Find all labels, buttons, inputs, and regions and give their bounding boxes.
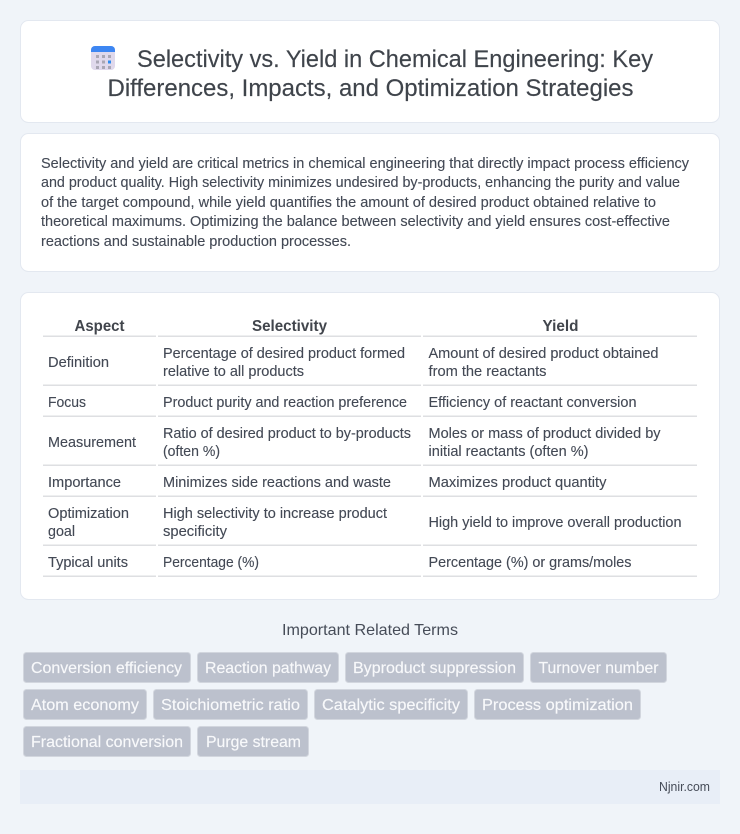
- tag: fractional conversion: Fractional conversion: [31, 734, 183, 751]
- table row: measurement: Measurement: [48, 435, 136, 451]
- table header: [74, 318, 578, 335]
- panel: introduction: [20, 134, 720, 272]
- tag: reaction pathway: Reaction pathway: [205, 660, 331, 677]
- tag: atom economy: Atom economy: [31, 697, 139, 714]
- title: [108, 46, 653, 102]
- table row: optimization goal: High yield to improve overall production: [428, 515, 682, 531]
- tags: related terms: [24, 652, 666, 756]
- table row: definition: relative to all products: [163, 364, 304, 380]
- table row: definition: Amount of desired product obtained: [428, 346, 658, 362]
- table header: Yield: [542, 318, 578, 335]
- table row: importance: Importance: [48, 475, 121, 491]
- table row: typical units: [48, 555, 632, 571]
- tag: catalytic specificity: Catalytic specificity: [322, 697, 460, 714]
- table row: optimization goal: [48, 506, 682, 540]
- tag: byproduct suppression: [346, 652, 524, 682]
- table row: importance: Maximizes product quantity: [428, 475, 607, 491]
- tag: turnover number: Turnover number: [538, 660, 659, 677]
- tag: turnover number: [530, 652, 666, 682]
- panel: comparison table: [20, 292, 720, 600]
- panel: title header: [20, 20, 720, 122]
- table row: typical units: Percentage (%) or grams/moles: [428, 555, 632, 571]
- table row: definition: Definition: [48, 355, 109, 371]
- table row: focus: [48, 395, 636, 411]
- table row: measurement: initial reactants (often %): [428, 444, 588, 460]
- table row: definition: Percentage of desired product formed: [163, 346, 405, 362]
- table header: Selectivity: [252, 318, 327, 335]
- table row: measurement: Moles or mass of product divided by: [428, 426, 661, 442]
- text block: introduction paragraph: reactions and sustainable production processes.: [41, 234, 351, 250]
- table header: Aspect: [74, 318, 125, 335]
- table row: optimization goal: goal: [48, 524, 75, 540]
- tag: purge stream: Purge stream: [206, 734, 301, 751]
- table row: optimization goal: Optimization: [48, 506, 129, 522]
- footer credit: Njnir.com: [659, 780, 710, 794]
- tag: catalytic specificity: [314, 690, 468, 720]
- tag: conversion efficiency: [24, 652, 190, 682]
- tag: process optimization: [474, 690, 640, 720]
- table row: definition: from the reactants: [428, 364, 546, 380]
- tag: process optimization: Process optimization: [482, 697, 633, 714]
- table row: typical units: Typical units: [48, 555, 128, 571]
- tag: atom economy: [24, 690, 146, 720]
- table row: focus: Efficiency of reactant conversion: [428, 395, 636, 411]
- table row: optimization goal: High selectivity to increase product: [163, 506, 387, 522]
- tag: stoichiometric ratio: [154, 690, 308, 720]
- table row: measurement: Ratio of desired product to by-products: [163, 426, 411, 442]
- table row: measurement: [48, 426, 661, 460]
- table row: focus: Product purity and reaction preference: [163, 395, 407, 411]
- table row: focus: Focus: [48, 395, 86, 411]
- tag: byproduct suppression: Byproduct suppression: [353, 660, 516, 677]
- text block: introduction paragraph: and product quality. High selectivity minimizes undesired by-products, enhancing the purity and value: [41, 175, 680, 191]
- text block: introduction paragraph: of the target compound, while yield quantifies the amount of desired product obtained relative to: [41, 195, 656, 211]
- text block: introduction paragraph: theoretical maximums. Optimizing the balance between selectivity and yield ensures cost-effective: [41, 214, 670, 230]
- table row: optimization goal: specificity: [163, 524, 228, 540]
- table row: measurement: (often %): [163, 444, 220, 460]
- heading: important related terms: Important Related Terms: [282, 622, 458, 639]
- table row: importance: [48, 475, 607, 491]
- table row: importance: Minimizes side reactions and waste: [163, 475, 391, 491]
- tag: reaction pathway: [198, 652, 338, 682]
- table row: typical units: Percentage (%): [163, 555, 259, 571]
- icon: calendar: [91, 46, 115, 70]
- text block: introduction paragraph: Selectivity and yield are critical metrics in chemical engineering that directly impact process efficiency: [41, 156, 690, 172]
- title: Selectivity vs. Yield in Chemical Engineering: Key: [137, 46, 653, 73]
- table row: definition: [48, 346, 658, 380]
- tag: conversion efficiency: Conversion efficiency: [31, 660, 182, 677]
- tag: stoichiometric ratio: Stoichiometric ratio: [161, 697, 300, 714]
- tag: fractional conversion: [24, 726, 190, 756]
- footer bar: [20, 770, 720, 804]
- title: Differences, Impacts, and Optimization Strategies: [108, 75, 634, 102]
- text block: introduction paragraph: [41, 156, 690, 250]
- tag: purge stream: [198, 726, 308, 756]
